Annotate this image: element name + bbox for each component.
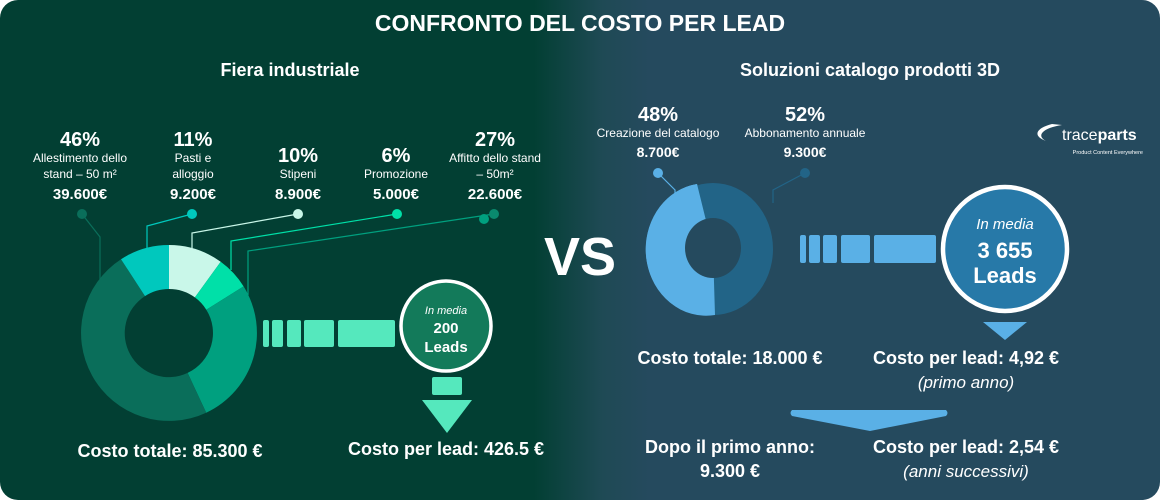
label 27%: 27% [475, 129, 515, 151]
right labels [597, 104, 866, 160]
label 10%: 10% [278, 145, 318, 167]
right labels: 48% [638, 104, 678, 126]
arrow left [422, 377, 472, 433]
right labels: Creazione del catalogo [597, 126, 720, 140]
label 46%: Allestimento dello [33, 151, 127, 165]
costo per lead left: Costo per lead: 426.5 € [348, 439, 544, 459]
costo per lead anni successivi: (anni successivi) [903, 462, 1029, 481]
label 6%: 6% [382, 145, 411, 167]
heading: soluzioni catalogo: Soluzioni catalogo prodotti 3D [740, 60, 1000, 80]
costo per lead right: (primo anno) [918, 373, 1014, 392]
label 11% [170, 129, 217, 203]
circle left leads: Leads [424, 339, 468, 356]
donut right [646, 183, 773, 316]
label 27% [449, 129, 541, 203]
costo totale left: Costo totale: 85.300 € [77, 441, 263, 461]
logo traceparts: traceparts [1062, 127, 1137, 144]
title: CONFRONTO DEL COSTO PER LEAD [375, 10, 785, 36]
circle left leads [401, 281, 491, 371]
right labels: 9.300€ [784, 144, 827, 160]
bars left [263, 320, 395, 347]
circle right leads: In media [976, 216, 1034, 233]
logo traceparts [1037, 124, 1143, 156]
label 11%: 11% [174, 129, 213, 151]
costo per lead right: Costo per lead: 4,92 € [873, 348, 1059, 368]
label 27%: 22.600€ [468, 186, 523, 203]
label 10% [275, 145, 322, 203]
label 11%: alloggio [172, 167, 214, 181]
label 27%: – 50m² [476, 167, 514, 181]
costo per lead right [873, 348, 1059, 392]
heading: fiera industriale: Fiera industriale [220, 60, 360, 80]
dopo il primo anno: Dopo il primo anno: [645, 437, 815, 457]
wide arrow [790, 410, 948, 431]
dopo il primo anno: 9.300 € [700, 461, 760, 481]
donut left [81, 245, 257, 421]
logo traceparts: Product Content Everywhere [1073, 150, 1143, 156]
label 27%: Affitto dello stand [449, 151, 541, 165]
circle right leads [943, 187, 1067, 311]
circle right leads: 3 655 [977, 238, 1033, 263]
label 46%: stand – 50 m² [43, 167, 117, 181]
label 46%: 46% [60, 129, 100, 151]
bars right [800, 235, 936, 263]
label 46% [33, 129, 127, 203]
leader lines right [653, 168, 810, 203]
label 6%: 5.000€ [373, 186, 420, 203]
VS: VS [544, 227, 616, 287]
label 10%: 8.900€ [275, 186, 322, 203]
right labels: 52% [785, 104, 825, 126]
dopo il primo anno [645, 437, 815, 481]
label 10%: Stipeni [280, 167, 316, 181]
label 6%: Promozione [364, 167, 428, 181]
costo per lead anni successivi: Costo per lead: 2,54 € [873, 437, 1059, 457]
label 11%: 9.200€ [170, 186, 217, 203]
leader lines left [82, 214, 494, 295]
circle right leads: Leads [973, 263, 1037, 288]
circle left leads: In media [425, 305, 467, 317]
arrow right [983, 322, 1027, 340]
costo per lead anni successivi [873, 437, 1059, 481]
label 46%: 39.600€ [53, 186, 108, 203]
costo totale right: Costo totale: 18.000 € [637, 348, 823, 368]
right labels: Abbonamento annuale [745, 126, 866, 140]
left labels [33, 129, 541, 203]
label 11%: Pasti e [175, 151, 212, 165]
circle left leads: 200 [433, 320, 459, 337]
label 6% [364, 145, 428, 203]
right labels: 8.700€ [637, 144, 680, 160]
